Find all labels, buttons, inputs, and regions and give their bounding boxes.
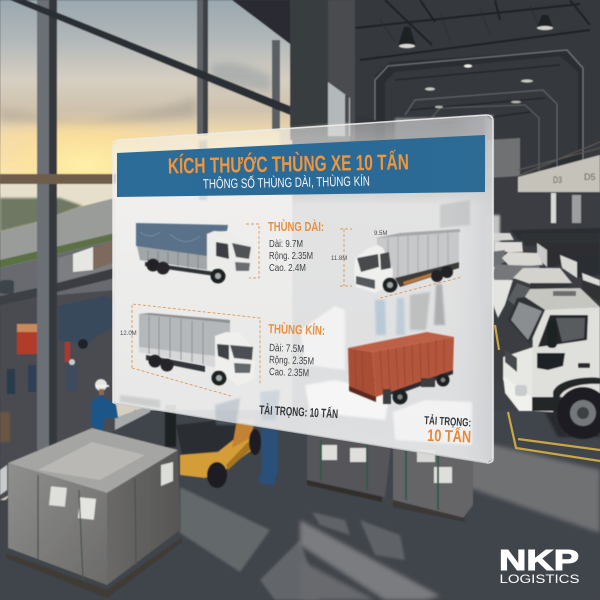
spec list: closed box xyxy=(269,342,314,379)
mezzanine door labels xyxy=(553,172,596,185)
label: 9.5M: 9.5M xyxy=(374,231,387,237)
spec list: closed box: Cao. 2.35M xyxy=(269,366,309,379)
logo: NKP Logistics xyxy=(499,545,580,586)
ceiling structure xyxy=(355,0,600,160)
title text: KÍCH THƯỚC THÙNG XE 10 TẤN xyxy=(168,149,409,178)
subtitle: THÔNG SỐ THÙNG DÀI, THÙNG KÍN xyxy=(203,174,370,191)
logo: NKP Logistics: NKP xyxy=(499,545,579,577)
hall arches xyxy=(375,50,582,205)
dimension: tarpaulin truck xyxy=(246,224,259,278)
mezzanine door labels: D3 xyxy=(553,175,562,185)
title banner xyxy=(117,135,485,197)
truck: tarpaulin cargo xyxy=(136,223,253,284)
logo: NKP Logistics: LOGISTICS xyxy=(500,574,580,586)
dimension box: closed box truck xyxy=(132,304,260,396)
ceiling lamps xyxy=(398,15,553,108)
outside landscape and highway xyxy=(0,184,115,204)
label: 11.8M: 11.8M xyxy=(331,256,347,262)
spec list: open-bed box: Rộng. 2.35M xyxy=(269,250,313,262)
glass panel xyxy=(113,115,493,463)
label: 12.0M: 12.0M xyxy=(120,331,137,337)
mezzanine door labels: D5 xyxy=(584,172,596,182)
truck: closed box xyxy=(139,313,255,386)
interior wall column xyxy=(232,0,328,140)
workers xyxy=(7,359,278,485)
mezzanine xyxy=(518,142,600,176)
heading: closed box: THÙNG KÍN: xyxy=(268,321,325,338)
floor xyxy=(0,410,600,600)
dimensions: closed van xyxy=(340,229,462,298)
shipping container truck xyxy=(348,332,454,404)
far cabs xyxy=(486,215,500,305)
ghost shapes behind the glass xyxy=(120,115,493,462)
spec list: open-bed box xyxy=(269,238,313,274)
payload note: right: TẢI TRỌNG: xyxy=(424,414,471,429)
spec list: closed box: Dài: 7.5M xyxy=(269,342,304,355)
front truck xyxy=(540,403,600,437)
yellow floor markings xyxy=(495,325,600,461)
spec list: open-bed box: Cao. 2.4M xyxy=(269,262,306,274)
center pallets xyxy=(307,425,473,522)
spec list: open-bed box: Dài: 9.7M xyxy=(269,238,303,250)
forklift xyxy=(165,405,261,488)
payload note: center: TẢI TRỌNG: 10 TẤN xyxy=(259,402,339,421)
row of parked trucks xyxy=(486,215,600,439)
wall below mezzanine xyxy=(485,178,600,300)
heading: open-bed box: THÙNG DÀI: xyxy=(268,219,324,234)
spec list: closed box: Rộng. 2.35M xyxy=(269,354,314,368)
truck: closed van, right xyxy=(354,229,460,293)
window frames xyxy=(37,0,57,450)
shrink-wrapped pallet xyxy=(6,428,182,598)
outside vehicles xyxy=(93,240,115,270)
payload value: right: 10 TẤN xyxy=(427,426,471,447)
